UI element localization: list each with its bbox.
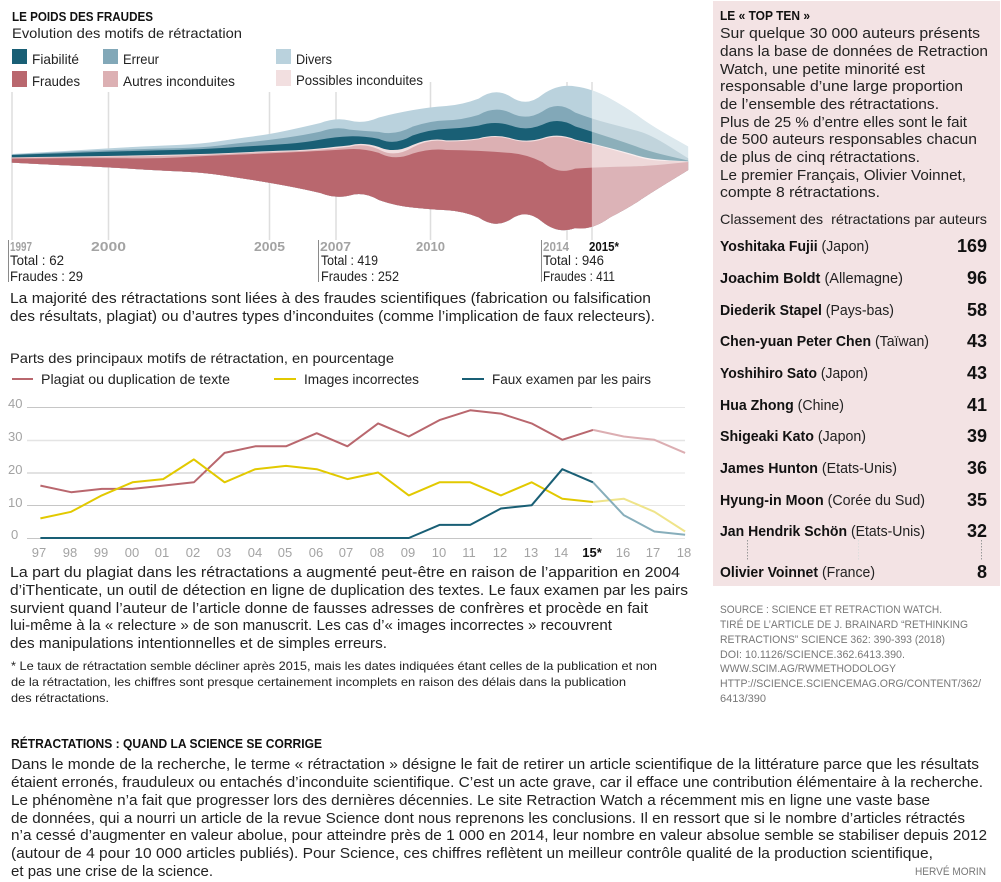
timeline labels: years and totals: 2014 <box>543 239 570 254</box>
legend: line chart: Images incorrectes <box>304 371 419 387</box>
text block: top ten intro: Plus de 25 % d’entre elles sont le fait <box>720 114 968 131</box>
timeline labels: years and totals: 2010 <box>416 239 445 254</box>
line chart: parts des motifs: 98 <box>63 545 77 560</box>
ranking list <box>720 236 987 582</box>
line chart: parts des motifs: 10 <box>8 495 22 510</box>
line chart: parts des motifs: 09 <box>401 545 415 560</box>
line chart: parts des motifs <box>8 396 691 560</box>
ranking list: Joachim Boldt (Allemagne) <box>720 270 903 287</box>
line chart: parts des motifs: 17 <box>646 545 660 560</box>
heading: le poids des fraudes <box>12 9 242 41</box>
ranking list: 96 <box>967 268 987 288</box>
text block: rétractations: de données, qui a nourri un article de la revue Science dont nous reprenons les conclusions. Il en ressort que si le nombre d’articles rétractés <box>11 810 965 827</box>
text block: top ten intro: de plus de cinq rétractations. <box>720 149 920 166</box>
text block: part du plagiat: d’iThenticate, un outil de détection en ligne de duplication des textes. Le faux examen par les pairs <box>10 582 688 599</box>
legend: stream chart <box>12 49 423 89</box>
line chart: parts des motifs: 08 <box>370 545 384 560</box>
legend: stream chart: Fraudes <box>32 73 80 89</box>
line chart: parts des motifs: 07 <box>339 545 353 560</box>
line chart: parts des motifs: 00 <box>125 545 139 560</box>
line chart: parts des motifs: 15* <box>582 545 603 560</box>
line chart: parts des motifs: 01 <box>155 545 169 560</box>
line chart: parts des motifs: 30 <box>8 429 22 444</box>
source: 6413/390 <box>720 693 766 705</box>
text block: top ten intro: responsable d’une large proportion <box>720 78 963 95</box>
line chart: parts des motifs: 12 <box>493 545 507 560</box>
text block: top ten intro: Le premier Français, Olivier Voinnet, <box>720 167 966 184</box>
ranking list: Hua Zhong (Chine) <box>720 397 844 414</box>
ranking list: 169 <box>957 236 987 256</box>
ranking list: Jan Hendrik Schön (Etats-Unis) <box>720 523 925 540</box>
line chart: parts des motifs: 06 <box>309 545 323 560</box>
footnote: * Le taux de rétractation semble décliner après 2015, mais les dates indiquées étant celles de la publication et non <box>11 659 657 673</box>
timeline labels: years and totals: Fraudes : 411 <box>543 268 615 284</box>
timeline labels: years and totals: 2005 <box>254 239 285 254</box>
timeline labels: years and totals: 2000 <box>91 239 126 254</box>
ranking list: 41 <box>967 395 987 415</box>
heading: parts des principaux motifs: Parts des principaux motifs de rétractation, en pourcentage <box>10 350 394 366</box>
source: HTTP://SCIENCE.SCIENCEMAG.ORG/CONTENT/362/ <box>720 678 982 690</box>
legend: stream chart: Fiabilité <box>32 51 79 67</box>
line chart: parts des motifs: 99 <box>94 545 108 560</box>
timeline labels: years and totals: Fraudes : 29 <box>10 268 83 284</box>
legend: stream chart: Possibles inconduites <box>296 72 423 88</box>
legend: stream chart: Autres inconduites <box>123 73 235 89</box>
panel: top ten <box>713 1 1000 586</box>
line chart: parts des motifs: 05 <box>278 545 292 560</box>
line chart: parts des motifs: 20 <box>8 462 22 477</box>
line chart: parts des motifs: 18 <box>677 545 691 560</box>
timeline labels: years and totals: 1997 <box>10 239 32 254</box>
ranking list: 32 <box>967 521 987 541</box>
text block: part du plagiat: La part du plagiat dans les rétractations a augmenté peut-être en raison de l’apparition en 2004 <box>10 564 680 581</box>
ranking list: Hyung-in Moon (Corée du Sud) <box>720 492 925 509</box>
footnote <box>11 659 657 705</box>
text block: rétractations: étaient erronés, frauduleux ou entachés d’inconduite scientifique. C’est un acte grave, car il efface une contribution élémentaire à la recherche. <box>11 774 983 791</box>
ranking list: 35 <box>967 490 987 510</box>
byline: HERVÉ MORIN <box>915 865 986 878</box>
ranking list: Diederik Stapel (Pays-bas) <box>720 302 894 319</box>
source <box>720 604 982 705</box>
legend: stream chart: Divers <box>296 51 332 67</box>
ranking list: 43 <box>967 331 987 351</box>
line chart: parts des motifs: 13 <box>524 545 538 560</box>
line chart: parts des motifs: 97 <box>32 545 46 560</box>
line chart: parts des motifs: 14 <box>554 545 568 560</box>
text block: top ten intro <box>720 8 988 201</box>
ranking list: Chen-yuan Peter Chen (Taïwan) <box>720 333 929 350</box>
ranking list: 43 <box>967 363 987 383</box>
text block: top ten intro: Sur quelque 30 000 auteurs présents <box>720 25 980 42</box>
source: SOURCE : SCIENCE ET RETRACTION WATCH. <box>720 604 942 616</box>
heading: le poids des fraudes: Evolution des motifs de rétractation <box>12 25 242 41</box>
text block: rétractations <box>11 756 987 880</box>
timeline labels: years and totals <box>8 239 620 284</box>
text block: rétractations: Le phénomène n’a fait que progresser lors des dernières décennies. Le site Retraction Watch a récemment mis en ligne une vaste base <box>11 792 930 809</box>
legend: line chart: Faux examen par les pairs <box>492 371 651 387</box>
timeline labels: years and totals: Total : 946 <box>543 252 604 268</box>
text block: top ten intro: Watch, une petite minorité est <box>720 61 926 78</box>
line chart: parts des motifs: 10 <box>432 545 446 560</box>
line chart: parts des motifs: 04 <box>248 545 262 560</box>
ranking list: 36 <box>967 458 987 478</box>
text block: part du plagiat: des manipulations intentionnelles et de simples erreurs. <box>10 635 387 652</box>
ranking list: Yoshitaka Fujii (Japon) <box>720 238 869 255</box>
heading: classement: Classement des rétractations par auteurs <box>720 211 987 227</box>
footnote: des rétractations. <box>11 691 109 705</box>
text block: majorité des rétractations: La majorité des rétractations sont liées à des fraudes scientifiques (fabrication ou falsification <box>10 290 651 307</box>
source: TIRÉ DE L’ARTICLE DE J. BRAINARD “RETHINKING <box>720 618 968 631</box>
text block: rétractations: n’a cessé d’augmenter en valeur abolue, pour atteindre près de 1 000 en 2014, leur nombre en valeur absolue semble se stabiliser depuis 2012 <box>11 827 987 844</box>
heading: rétractations: RÉTRACTATIONS : QUAND LA SCIENCE SE CORRIGE <box>11 736 322 751</box>
ranking list: 8 <box>977 562 987 582</box>
line chart: parts des motifs: 02 <box>186 545 200 560</box>
legend: line chart: Plagiat ou duplication de texte <box>41 371 230 387</box>
line chart: parts des motifs: 0 <box>11 527 18 542</box>
ranking list: 58 <box>967 300 987 320</box>
line chart: parts des motifs: 40 <box>8 396 22 411</box>
line chart: parts des motifs: 11 <box>462 545 476 560</box>
text block: top ten intro: de 500 auteurs responsables chacun <box>720 131 977 148</box>
text block: part du plagiat: lui-même à la « relecture » de son manuscrit. Les cas d’« images incorrectes » recouvrent <box>10 617 613 634</box>
ranking list: James Hunton (Etats-Unis) <box>720 460 897 477</box>
source: RETRACTIONS” SCIENCE 362: 390-393 (2018) <box>720 634 945 646</box>
text block: majorité des rétractations <box>10 290 655 325</box>
text block: rétractations: Dans le monde de la recherche, le terme « rétractation » désigne le fait de retirer un article scientifique de la littérature parce que les résultats <box>11 756 979 773</box>
legend: stream chart: Erreur <box>123 51 159 67</box>
ranking list: Yoshihiro Sato (Japon) <box>720 365 868 382</box>
text block: rétractations: et pas une crise de la science. <box>11 863 213 880</box>
text block: top ten intro: LE « TOP TEN » <box>720 8 810 23</box>
source: DOI: 10.1126/SCIENCE.362.6413.390. <box>720 649 905 661</box>
source: WWW.SCIM.AG/RWMETHODOLOGY <box>720 663 897 675</box>
line chart: parts des motifs: 16 <box>616 545 630 560</box>
heading: le poids des fraudes: LE POIDS DES FRAUDES <box>12 9 153 24</box>
text block: top ten intro: de l’ensemble des rétractations. <box>720 96 939 113</box>
text block: majorité des rétractations: des résultats, plagiat) ou d’autres types d’inconduites (comme l’implication de faux relecteurs). <box>10 308 655 325</box>
text block: rétractations: (autour de 4 pour 10 000 articles publiés). Pour Science, ces chiffres reflètent un meilleur contrôle qualité de la production scientifique, <box>11 845 933 862</box>
ranking list: 39 <box>967 426 987 446</box>
line chart: parts des motifs: 03 <box>217 545 231 560</box>
legend: line chart <box>12 371 651 387</box>
footnote: de la rétractation, les chiffres sont presque certainement incomplets en raison des délais dans la publication <box>11 675 626 689</box>
timeline labels: years and totals: 2007 <box>320 239 351 254</box>
ranking list: Olivier Voinnet (France) <box>720 564 875 581</box>
timeline labels: years and totals: 2015* <box>589 239 620 254</box>
stream chart: evolution des motifs <box>12 80 691 240</box>
text block: top ten intro: compte 8 rétractations. <box>720 184 880 201</box>
text block: part du plagiat <box>10 564 688 652</box>
ranking list: Shigeaki Kato (Japon) <box>720 428 866 445</box>
text block: top ten intro: dans la base de données de Retraction <box>720 43 988 60</box>
timeline labels: years and totals: Total : 62 <box>10 252 64 268</box>
timeline labels: years and totals: Total : 419 <box>321 252 378 268</box>
text block: part du plagiat: survient quand l’auteur de l’article donne de fausses adresses de confrères et procède en fait <box>10 600 649 617</box>
timeline labels: years and totals: Fraudes : 252 <box>321 268 399 284</box>
